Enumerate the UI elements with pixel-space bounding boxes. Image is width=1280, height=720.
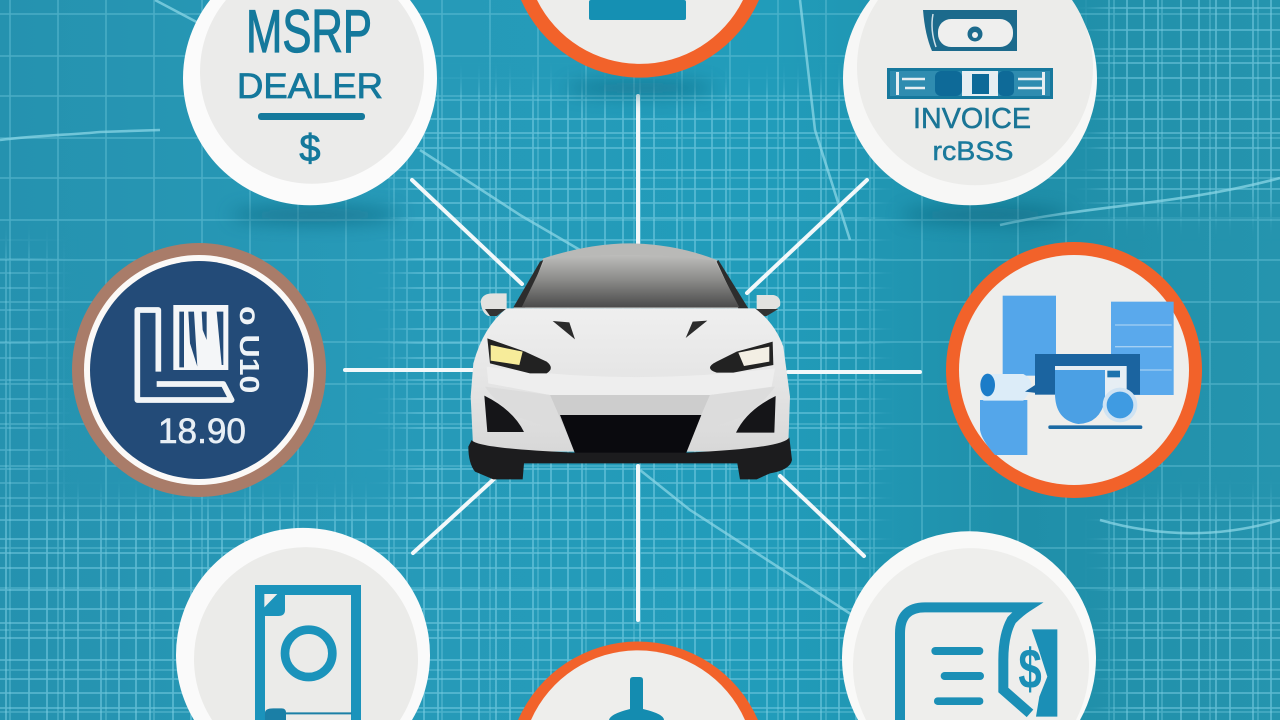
panel: receipt with dollar (842, 531, 1096, 720)
car mirrors (481, 293, 780, 316)
icon: ruled blue sheet (1111, 302, 1174, 395)
icon: striped card (173, 305, 228, 370)
right headlight (710, 342, 773, 373)
left headlight (487, 338, 551, 373)
front grille (560, 415, 701, 456)
front splitter (468, 437, 792, 479)
icon: folded corner (259, 589, 285, 616)
icon: receipt text lines (931, 647, 984, 705)
icon: banded bill (887, 68, 1053, 99)
icon: gauge needle (609, 677, 664, 720)
panel: navy price circle (72, 243, 326, 497)
icon: banknote (923, 10, 1017, 51)
icon: blue person and bottle (980, 374, 1040, 455)
icon: tray outline (137, 310, 232, 400)
icon: page outline (260, 590, 356, 720)
divider bar (258, 113, 365, 120)
icon: dark monitor (1035, 354, 1140, 403)
circle drop shadows (230, 81, 1070, 223)
label: INVOICE: INVOICE (913, 103, 1031, 135)
car hood vents (553, 321, 707, 339)
car roof and windscreen (513, 243, 748, 308)
panel: document with circle (176, 528, 430, 720)
car body (471, 308, 790, 452)
car lower fascia shading (487, 367, 775, 395)
connector lines from car to circles (345, 96, 920, 620)
icon: page bottom edge (265, 708, 352, 720)
icon: blue rectangle (589, 0, 686, 20)
icon: receipt outline (900, 607, 1030, 720)
text: small rotated digits: o U10 (234, 306, 265, 393)
label: rcBSS: rcBSS (932, 136, 1014, 166)
icon: ring (285, 630, 332, 677)
panel: bottom center orange circle (518, 642, 758, 720)
icon: dollar sign: $ (1018, 638, 1042, 701)
panel: invoice circle (843, 0, 1097, 205)
label: DEALER: DEALER (237, 67, 383, 106)
side air intakes (484, 396, 776, 433)
panel: top center orange circle (521, 0, 759, 78)
panel: MSRP dealer circle (183, 0, 437, 205)
panel: orange document circle (946, 242, 1202, 498)
icon: base line (1048, 425, 1142, 429)
text: 18.90: 18.90 (158, 412, 246, 451)
icon: dollar tab (1032, 629, 1057, 717)
icon: dollar sign: $ (299, 128, 321, 170)
icon: tall blue sheet (1003, 296, 1056, 376)
icon: shield and ring (1055, 370, 1137, 424)
car: front view (468, 243, 792, 479)
heading: MSRP: MSRP (246, 0, 372, 65)
